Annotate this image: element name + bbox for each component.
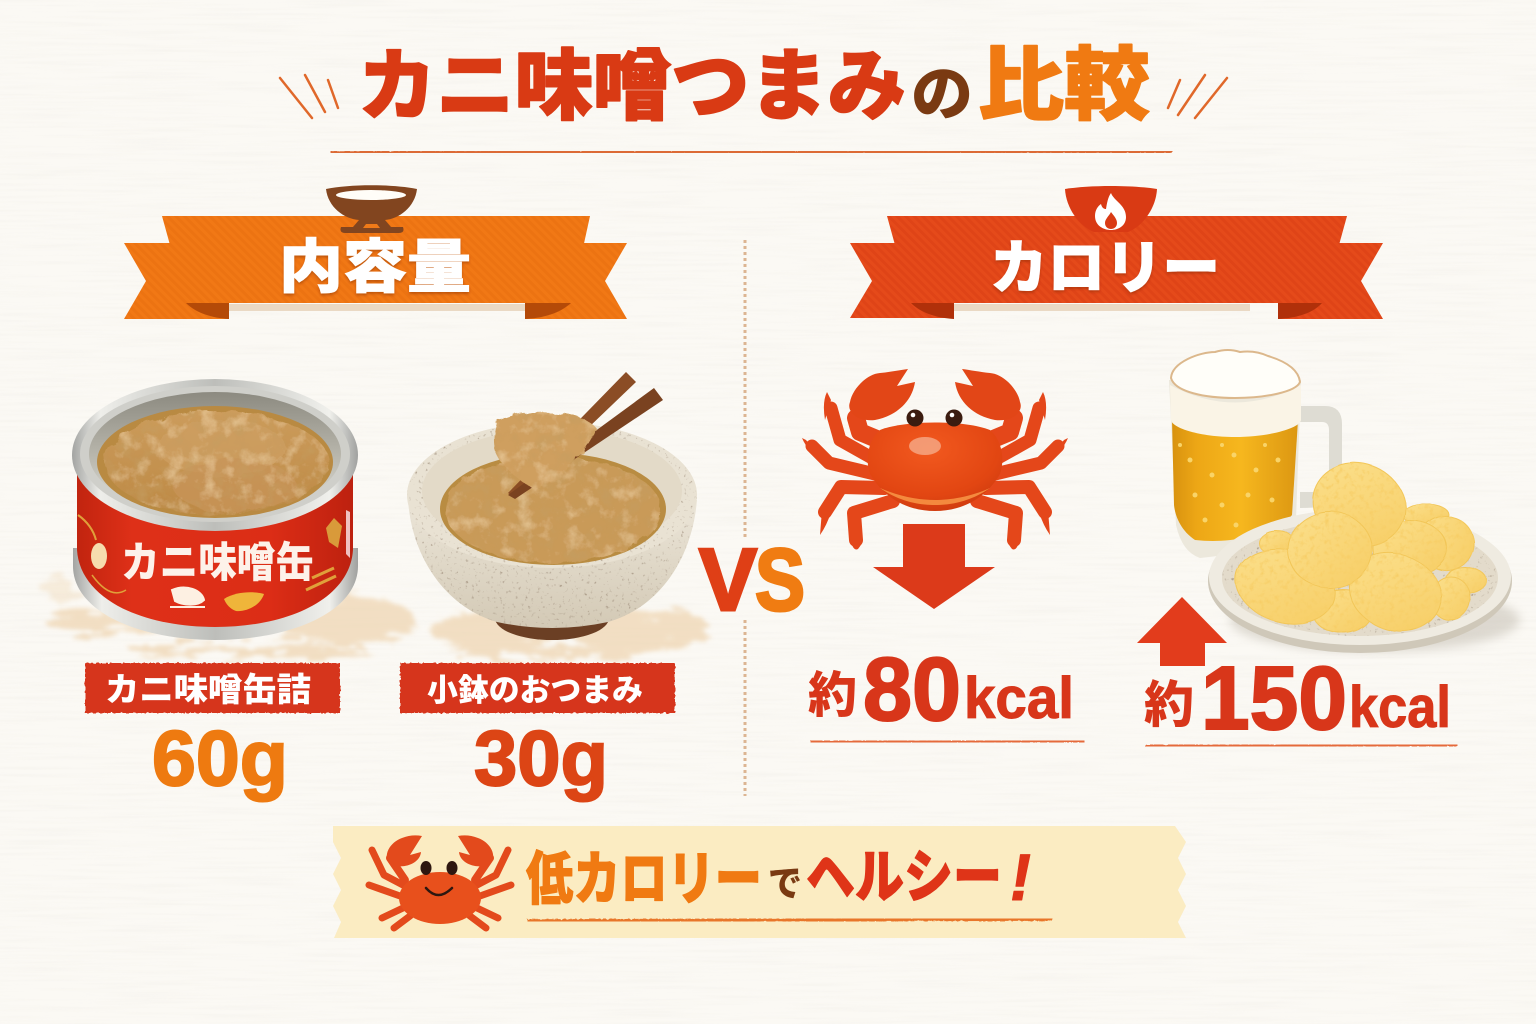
value: 80 kcal xyxy=(808,640,1074,740)
panel: contents xyxy=(44,185,712,802)
VS mark xyxy=(699,530,805,629)
can label icons xyxy=(78,510,350,611)
can label text: カニ味噌缶 xyxy=(121,529,314,590)
illustration: beer mug xyxy=(1169,350,1342,558)
VS mark: S xyxy=(755,530,805,629)
title: カニ味噌つまみ xyxy=(358,24,906,136)
title accent marks xyxy=(280,75,1227,118)
value: 80 kcal: 約 xyxy=(808,656,857,727)
icon: flame bowl xyxy=(1065,186,1157,232)
value: 80 kcal: 80 xyxy=(863,640,961,740)
illustration: miso can xyxy=(72,379,358,640)
icon: smiling crab xyxy=(369,835,511,928)
banner message: ! xyxy=(1004,841,1039,915)
underline: 150 kcal xyxy=(1145,745,1458,746)
arrow: down xyxy=(873,524,995,609)
underline: 80 kcal xyxy=(810,741,1084,742)
illustration: chips on plate xyxy=(1208,450,1520,653)
banner message: 低カロリー xyxy=(526,832,762,916)
banner underline xyxy=(527,919,1052,921)
title: の xyxy=(911,46,973,133)
value: 150 kcal: 150 xyxy=(1201,649,1347,749)
miso stains xyxy=(44,576,712,658)
illustration: crab xyxy=(802,369,1068,549)
value: 80 kcal: kcal xyxy=(964,666,1074,731)
value: 30g: 30g xyxy=(474,714,608,802)
arrow: up xyxy=(1137,597,1227,666)
illustration: bowl with chopsticks xyxy=(407,372,697,640)
label: canned miso: カニ味噌缶詰 xyxy=(105,663,311,711)
value: 150 kcal: 約 xyxy=(1144,665,1194,737)
panel: calories xyxy=(802,186,1520,749)
ribbon: contents heading: 内容量 xyxy=(279,220,471,304)
title xyxy=(358,21,1150,137)
value: 150 kcal xyxy=(1144,649,1451,749)
VS mark: V xyxy=(699,530,757,629)
ribbon: calories heading: カロリー xyxy=(990,221,1220,305)
banner message: ヘルシー xyxy=(806,830,1002,914)
icon: brown bowl xyxy=(326,185,417,233)
banner message xyxy=(526,830,1039,916)
banner message: で xyxy=(768,855,802,907)
ribbon: contents heading xyxy=(124,216,627,319)
value: 60g: 60g xyxy=(152,714,288,802)
label: small bowl snack: 小鉢のおつまみ xyxy=(427,665,643,710)
value: 150 kcal: kcal xyxy=(1349,675,1451,740)
title: 比較 xyxy=(978,21,1150,137)
center dotted divider xyxy=(744,240,746,796)
ribbon: calories heading xyxy=(850,216,1383,319)
title underline xyxy=(331,152,1172,153)
banner: healthy message xyxy=(333,826,1186,938)
